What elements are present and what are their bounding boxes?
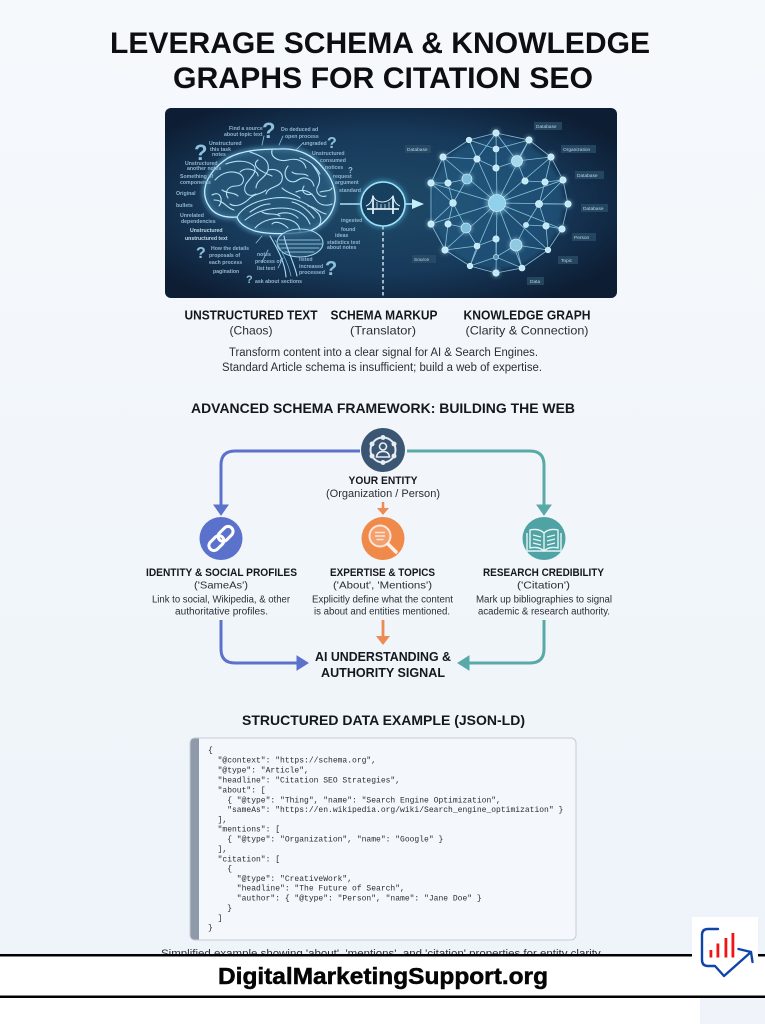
text: AI signal: AI UNDERSTANDING &: [315, 649, 451, 664]
icon: open book: [522, 517, 566, 560]
icon: question marks and unstructured text: Unstructured: [190, 228, 223, 234]
icon: question marks and unstructured text: proposals of: [209, 253, 240, 259]
icon: question marks and unstructured text: dependencies: [181, 219, 216, 225]
title: LEVERAGE SCHEMA & KNOWLEDGE: [110, 27, 650, 60]
text: research column: ('Citation'): [517, 580, 570, 592]
text block: intro: [222, 347, 542, 374]
panel: hero illustration: [165, 108, 617, 298]
panel: code example: "@type": "Article",: [208, 766, 309, 776]
panel: code example: }: [208, 924, 213, 933]
panel: code example: "mentions": [: [208, 826, 280, 834]
icon: question marks and unstructured text: How the details: [211, 246, 249, 252]
panel: code example: "headline": "Citation SEO Strategies",: [208, 776, 400, 786]
icon: question marks and unstructured text: processed: [299, 270, 325, 276]
icon: question marks and unstructured text: request: [333, 174, 352, 180]
panel: code example: "@context": "https://schema.org",: [208, 756, 376, 766]
text: your entity: YOUR ENTITY: [348, 475, 418, 487]
chart: knowledge graph network: Data: [530, 279, 540, 285]
icon: question marks and unstructured text: consumed: [320, 158, 346, 164]
icon: question marks and unstructured text: process of: [255, 259, 282, 265]
icon: question marks and unstructured text: notes: [257, 252, 271, 258]
icon: question marks and unstructured text: ingested: [341, 218, 362, 224]
icon: question marks and unstructured text: Find a source: [229, 126, 263, 132]
icon: chain link: [200, 517, 242, 560]
panel: code example: "author": { "@type": "Person", "name": "Jane Doe" }: [208, 894, 482, 904]
text block: intro: Transform content into a clear signal for AI & Search Engines.: [229, 347, 538, 359]
chart: knowledge graph network: Database: [583, 206, 604, 212]
chart: knowledge graph network: [405, 122, 608, 285]
icon: question marks and unstructured text: about notes: [327, 245, 357, 251]
icon: question marks and unstructured text: notes: [212, 152, 226, 158]
panel: code example: }: [208, 904, 232, 914]
icon: question marks and unstructured text: unstructured text: [185, 236, 228, 242]
icon: question marks and unstructured text: list text: [257, 266, 275, 272]
text: AI signal: [315, 649, 451, 680]
title: GRAPHS FOR CITATION SEO: [173, 62, 593, 95]
text: identity column: ('SameAs'): [194, 580, 248, 592]
icon: question marks and unstructured text: sections: [281, 279, 302, 285]
heading: structured data: STRUCTURED DATA EXAMPLE (JSON-LD): [242, 712, 525, 728]
chart: knowledge graph network: Source: [414, 257, 430, 263]
icon: question marks and unstructured text: another notes: [187, 166, 221, 172]
chart: knowledge graph network: Database: [536, 124, 557, 130]
text: code caption: Simplified example showing 'about', 'mentions', and 'citation' properties for entity clarity.: [161, 948, 603, 960]
panel: code example: { "@type": "Thing", "name": "Search Engine Optimization",: [208, 796, 501, 806]
text: expertise column: ('About', 'Mentions'): [333, 580, 432, 592]
heading: framework: ADVANCED SCHEMA FRAMEWORK: BUILDING THE WEB: [191, 400, 575, 416]
icon: question marks and unstructured text: ask about: [255, 279, 279, 285]
icon: logo: [692, 917, 758, 989]
arrow: expertise to signal: [376, 620, 390, 645]
text: your entity: [326, 475, 440, 500]
column labels: hero stages: KNOWLEDGE GRAPH: [464, 308, 590, 322]
icon: question marks and unstructured text: found: [341, 227, 355, 233]
arrow: identity to signal: [221, 620, 308, 670]
text: expertise column: EXPERTISE & TOPICS: [330, 567, 435, 579]
icon: question marks and unstructured text: Unstructured: [185, 161, 218, 167]
icon: question marks and unstructured text: each process: [209, 260, 242, 266]
text: research column: [476, 567, 612, 618]
icon: question marks and unstructured text: statistics text: [327, 240, 360, 246]
panel: code example: { "@type": "Organization", "name": "Google" }: [208, 836, 443, 844]
arrow: research to signal: [458, 620, 544, 670]
text: research column: academic & research authority.: [478, 606, 610, 618]
panel: code example: {: [208, 746, 213, 756]
icon: question marks and unstructured text: pagination: [213, 269, 239, 275]
icon: question marks and unstructured text: ideas: [335, 233, 348, 239]
column labels: hero stages: SCHEMA MARKUP: [330, 308, 438, 322]
column labels: hero stages: [184, 308, 590, 338]
icon: question marks and unstructured text: increased: [299, 264, 323, 270]
panel: code example: {: [208, 865, 232, 874]
arrow: entity to identity: [214, 451, 360, 515]
footer band: [0, 954, 765, 1024]
panel: code example: "citation": [: [208, 856, 280, 864]
panel: code example: "headline": "The Future of Search",: [208, 884, 405, 894]
icon: question marks and unstructured text: ?: [327, 135, 337, 152]
column labels: hero stages: (Clarity & Connection): [466, 324, 589, 338]
icon: question marks and unstructured text: Original: [176, 191, 196, 197]
icon: question marks and unstructured text: this task: [210, 147, 231, 153]
icon: question marks and unstructured text: ?: [196, 245, 206, 262]
icon: question marks and unstructured text: notices: [325, 165, 343, 171]
text: your entity: (Organization / Person): [326, 488, 440, 500]
icon: question marks and unstructured text: standard: [339, 188, 361, 194]
arrow: entity to research: [407, 451, 551, 515]
illustration: brain: [205, 136, 335, 277]
icon: question marks and unstructured text: ?: [194, 140, 207, 165]
text: expertise column: Explicitly define what the content: [312, 594, 453, 606]
panel: code example: ],: [208, 816, 227, 825]
icon: question marks and unstructured text: components: [180, 180, 211, 186]
chart: knowledge graph network: Person: [574, 235, 590, 241]
icon: your entity: [361, 428, 405, 472]
text: identity column: IDENTITY & SOCIAL PROFILES: [146, 567, 297, 579]
text: AI signal: AUTHORITY SIGNAL: [321, 665, 445, 680]
panel: code example: ]: [208, 914, 222, 924]
footer text: DigitalMarketingSupport.org: [218, 963, 548, 989]
chart: knowledge graph network: Database: [577, 173, 598, 179]
icon: magnifier: [362, 517, 404, 560]
column labels: hero stages: (Translator): [350, 324, 416, 338]
icon: question marks and unstructured text: ungraded: [303, 141, 327, 147]
icon: question marks and unstructured text: ?: [348, 166, 353, 175]
panel: code example: "sameAs": "https://en.wikipedia.org/wiki/Search_engine_optimization" }: [208, 806, 563, 815]
icon: question marks and unstructured text: ?: [246, 274, 253, 286]
icon: question marks and unstructured text: bullets: [176, 203, 193, 209]
panel: code example: "about": [: [208, 786, 266, 796]
chart: knowledge graph network: Topic: [561, 258, 573, 264]
arrow: entity to expertise: [377, 502, 389, 515]
icon: question marks and unstructured text: Unstructured: [312, 151, 345, 157]
text: identity column: authoritative profiles.: [175, 606, 268, 618]
text block: intro: Standard Article schema is insufficient; build a web of expertise.: [222, 362, 542, 374]
panel: code example: ],: [208, 846, 227, 854]
icon: question marks and unstructured text: [176, 118, 362, 286]
icon: question marks and unstructured text: Unrelated: [180, 213, 204, 219]
column labels: hero stages: (Chaos): [230, 324, 272, 338]
icon: question marks and unstructured text: Unstructured: [209, 141, 242, 147]
text: identity column: Link to social, Wikipedia, & other: [152, 594, 291, 606]
icon: question marks and unstructured text: open process: [285, 134, 319, 140]
icon: question marks and unstructured text: Do deduced ad: [281, 127, 318, 133]
icon: question marks and unstructured text: ?: [325, 258, 337, 280]
text: expertise column: [312, 567, 453, 618]
icon: question marks and unstructured text: Something of: [180, 174, 213, 180]
text: expertise column: is about and entities mentioned.: [314, 606, 450, 618]
icon: question marks and unstructured text: about topic text: [224, 132, 263, 138]
title: [110, 27, 650, 95]
text: research column: Mark up bibliographies to signal: [476, 594, 612, 606]
icon: question marks and unstructured text: argument: [335, 180, 359, 186]
chart: knowledge graph network: Database: [407, 147, 428, 153]
panel: code example: "@type": "CreativeWork",: [208, 875, 352, 884]
column labels: hero stages: UNSTRUCTURED TEXT: [184, 308, 318, 322]
panel: code example: [190, 738, 576, 940]
icon: question marks and unstructured text: ?: [262, 118, 275, 143]
icon: bridge translator: [340, 182, 424, 298]
text: research column: RESEARCH CREDIBILITY: [483, 567, 605, 579]
text: identity column: [146, 567, 297, 618]
chart: knowledge graph network: Organization: [563, 147, 591, 153]
icon: question marks and unstructured text: listed: [299, 257, 313, 263]
